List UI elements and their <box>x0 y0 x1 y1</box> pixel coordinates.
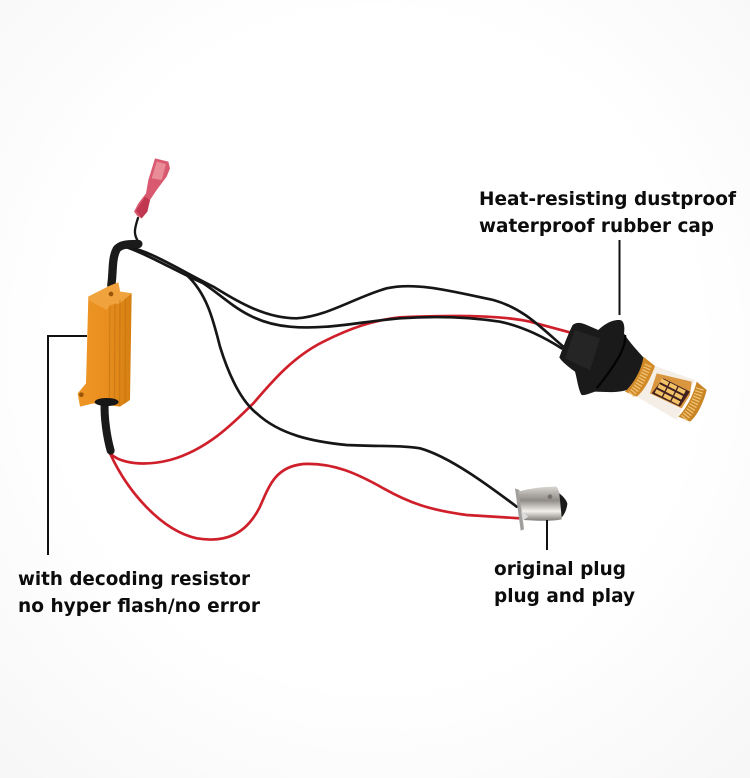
leader line: plug <box>546 520 548 550</box>
LED board <box>652 378 690 407</box>
label: decoding resistor: no hyper flash/no error <box>18 595 261 617</box>
rubber cap <box>559 320 643 395</box>
label: original plug: original plug <box>494 558 626 580</box>
black wire to bulb, lower <box>120 245 562 348</box>
label: rubber cap: waterproof rubber cap <box>479 215 714 237</box>
decoding resistor <box>78 282 132 407</box>
leader line: rubber cap <box>618 240 620 315</box>
resistor opening <box>95 398 119 406</box>
end gold ring <box>678 382 707 422</box>
label: decoding resistor <box>18 568 261 617</box>
red spade terminal <box>134 158 170 218</box>
black wire to bulb, upper <box>120 245 563 347</box>
black wire to plug <box>187 275 517 507</box>
terminal lead <box>135 218 139 243</box>
label: original plug: plug and play <box>494 585 636 607</box>
mounting holes <box>109 292 113 296</box>
LED core <box>650 373 692 408</box>
wiring harness <box>105 218 573 540</box>
upper sleeve <box>111 244 138 285</box>
label: rubber cap <box>479 188 737 237</box>
red wire to plug <box>110 453 520 540</box>
collar gold ring <box>625 357 655 397</box>
bulb <box>559 320 707 422</box>
lower sleeve <box>105 403 111 451</box>
label: decoding resistor: with decoding resistor <box>18 568 251 590</box>
original plug <box>515 487 567 531</box>
leader line: resistor <box>48 336 87 555</box>
bulb glass <box>637 366 695 420</box>
red wire to bulb <box>110 316 573 463</box>
label: original plug <box>494 558 636 607</box>
label: rubber cap: Heat-resisting dustproof <box>479 188 737 210</box>
